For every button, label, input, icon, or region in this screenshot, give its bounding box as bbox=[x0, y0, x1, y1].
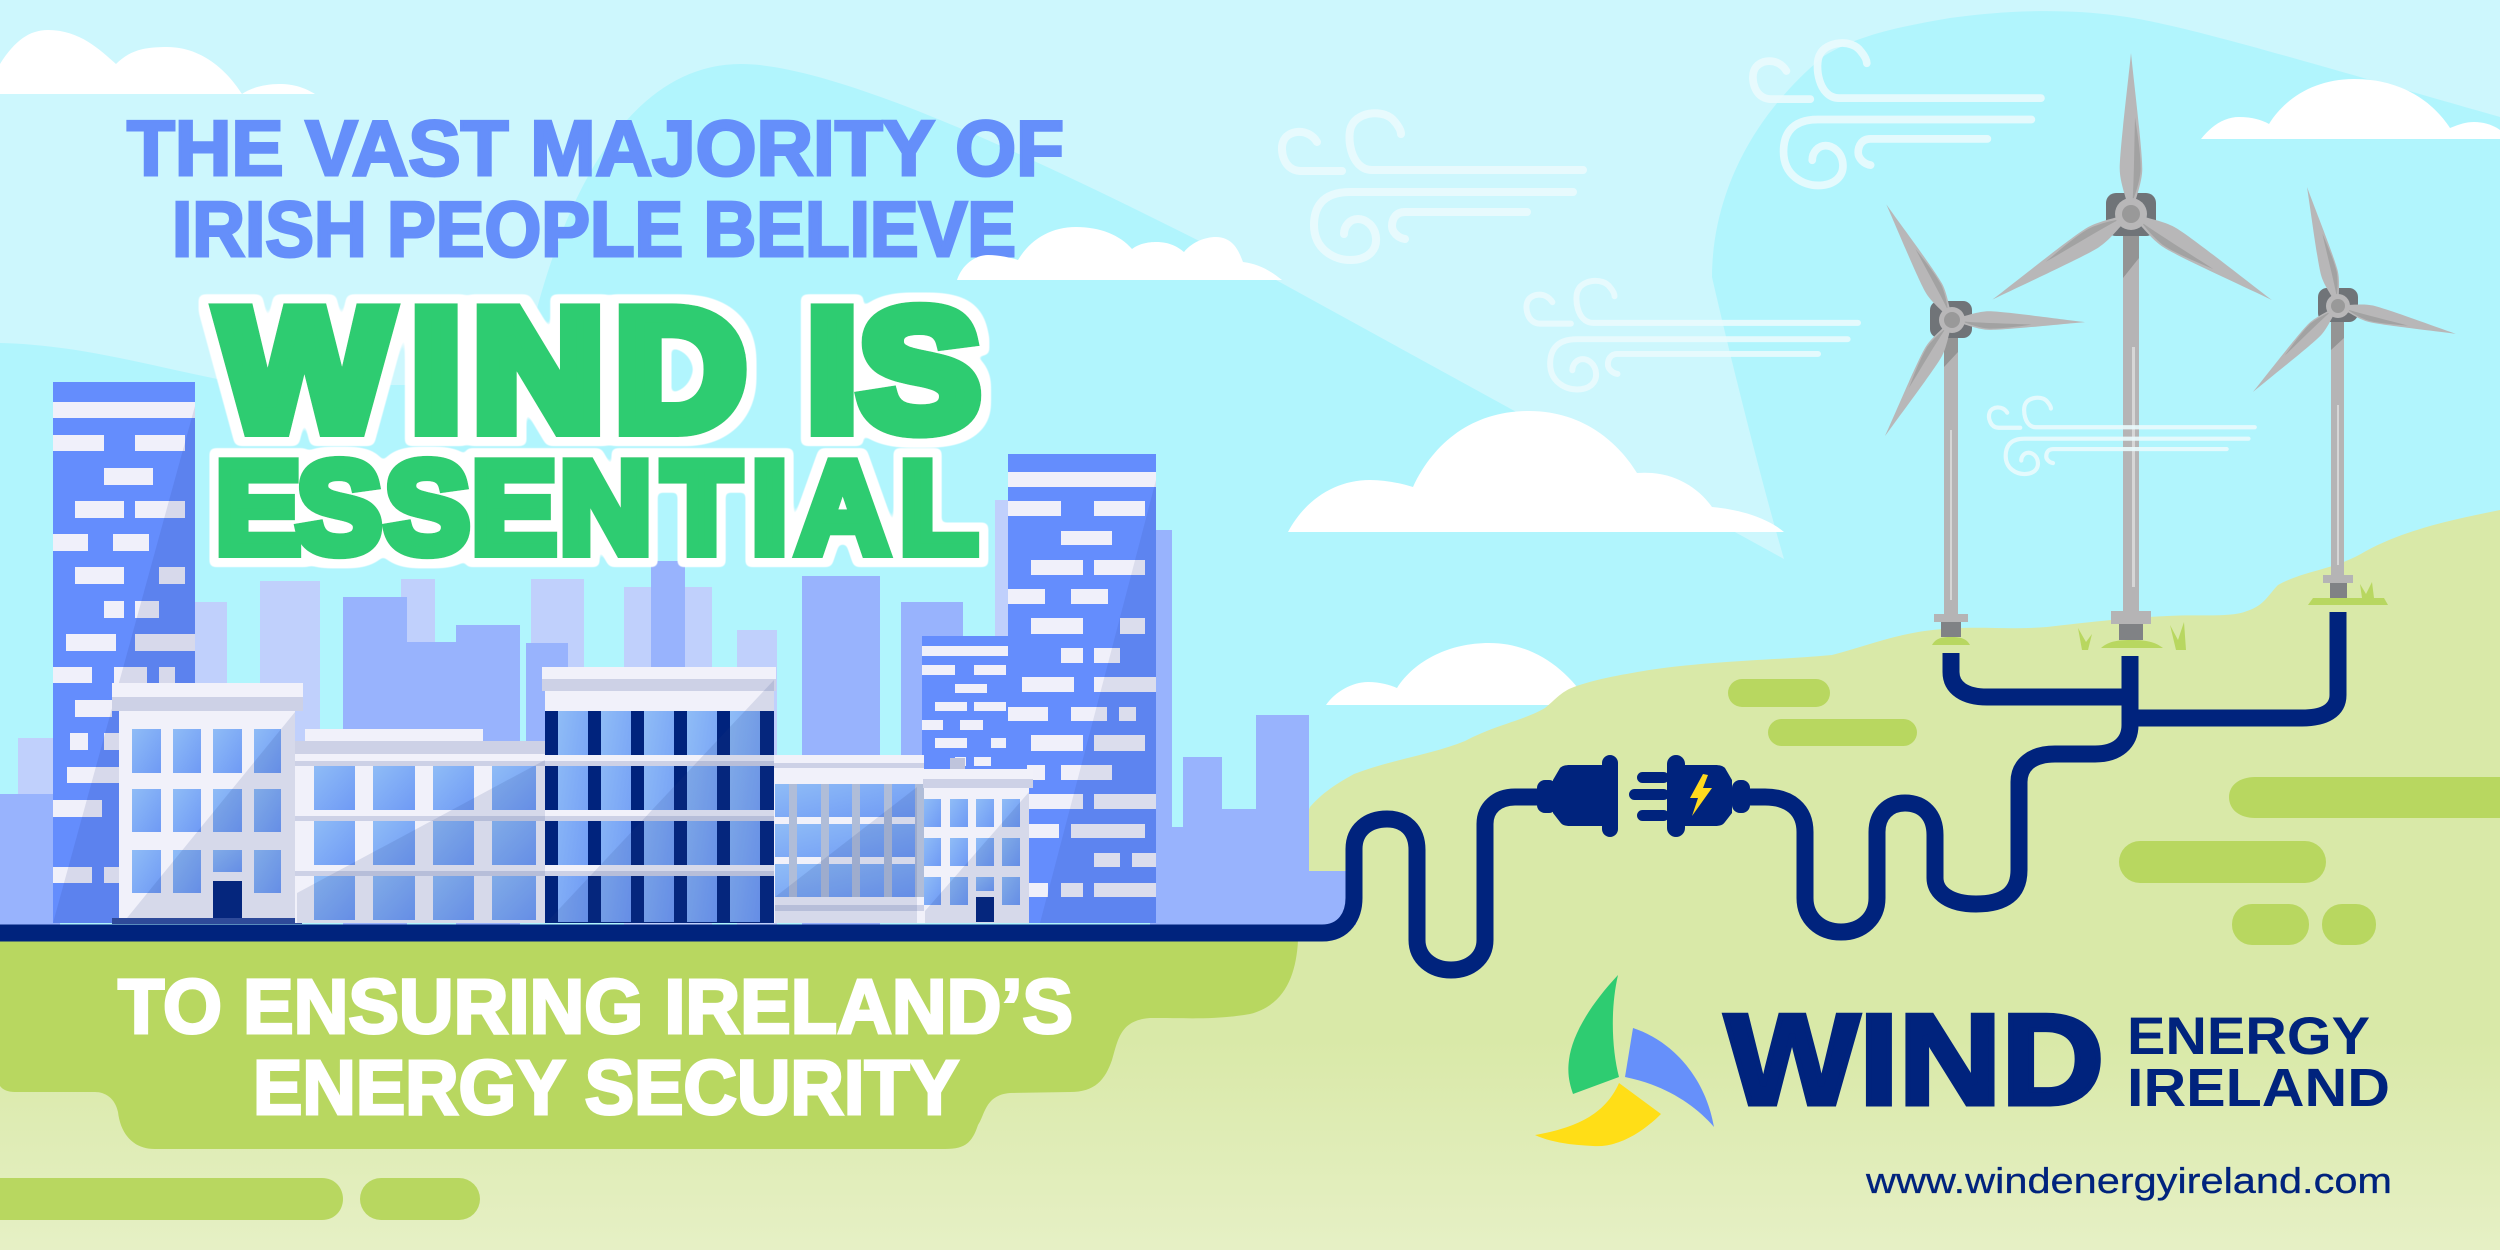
heading: WIND IS: WIND IS bbox=[219, 275, 980, 466]
icon: plug left bbox=[1537, 755, 1618, 837]
logo: WIND wordmark: WIND bbox=[1725, 988, 2104, 1132]
cloud: top right bbox=[2201, 79, 2500, 139]
green banner bbox=[0, 941, 1298, 1149]
logo: turbine mark bbox=[1535, 975, 1714, 1146]
building D glass bbox=[774, 755, 924, 923]
logo: ENERGY: ENERGY bbox=[2127, 1007, 2370, 1066]
building A white with door bbox=[112, 683, 303, 924]
office tower right bbox=[1008, 454, 1156, 923]
cloud: low centre bbox=[1326, 643, 1590, 705]
cloud: large centre bbox=[1288, 411, 1784, 532]
wind swirl: between turbines bbox=[1989, 398, 2255, 474]
subheading line 1: TO ENSURING IRELAND’S bbox=[118, 964, 1073, 1050]
cloud: top left bbox=[0, 30, 315, 94]
terrain bars right bbox=[1728, 679, 2500, 945]
subheading line 2: ENERGY SECURITY bbox=[253, 1045, 959, 1131]
heading: intro line 2: IRISH PEOPLE BELIEVE bbox=[172, 185, 1016, 273]
green hill and ground bbox=[0, 510, 2500, 1250]
cloud: beside headline bbox=[957, 227, 1282, 280]
building C navy columns bbox=[542, 667, 776, 923]
wind turbine left bbox=[1877, 200, 2085, 645]
logo: IRELAND: IRELAND bbox=[2127, 1058, 2390, 1118]
wind turbine right bbox=[2247, 185, 2458, 605]
heading: intro line 1: THE VAST MAJORITY OF bbox=[127, 104, 1064, 192]
office tower left bbox=[53, 382, 195, 923]
wind turbine centre bbox=[1986, 53, 2278, 650]
wind swirl: top bbox=[1753, 43, 2041, 185]
building E with door bbox=[923, 769, 1033, 923]
background skyline bbox=[0, 500, 1356, 930]
heading: ESSENTIAL: ESSENTIAL bbox=[216, 436, 977, 580]
wind swirl: middle bbox=[1526, 281, 1858, 389]
wind swirl: upper left bbox=[1282, 113, 1583, 260]
building B wide bbox=[295, 729, 545, 923]
icon: plug right with bolt bbox=[1629, 755, 1750, 837]
power cable bbox=[0, 612, 2338, 970]
bottom left bars bbox=[0, 1178, 480, 1220]
small tower middle bbox=[922, 636, 1008, 786]
website url: www.windenergyireland.com bbox=[1865, 1160, 2392, 1201]
